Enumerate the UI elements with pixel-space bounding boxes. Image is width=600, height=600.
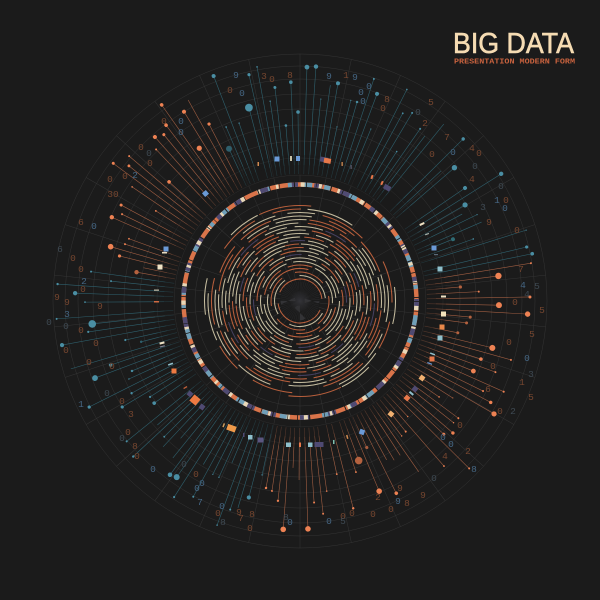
scattered digits: 5 — [340, 516, 346, 527]
scattered digits: 9 — [395, 496, 401, 507]
scattered digits: 0 — [448, 439, 454, 450]
scattered digits: 0 — [472, 161, 478, 172]
scattered digits: 9 — [397, 483, 403, 494]
scattered digits: 0 — [109, 361, 115, 372]
scattered digits: 0 — [70, 253, 76, 264]
scattered digits: 8 — [384, 94, 390, 105]
scattered digits: 4 — [469, 174, 475, 185]
scattered digits: 5 — [539, 305, 545, 316]
scattered digits: 0 — [194, 483, 200, 494]
chart core — [280, 281, 320, 321]
scattered digits: 0 — [122, 171, 128, 182]
scattered digits: 0 — [358, 87, 364, 98]
scattered digits: 0 — [366, 81, 372, 92]
scattered digits: 0 — [146, 148, 152, 159]
scattered digits — [46, 70, 545, 534]
scattered digits: 0 — [125, 427, 131, 438]
scattered digits: 0 — [239, 88, 245, 99]
scattered digits: 2 — [132, 170, 138, 181]
scattered digits: 0 — [80, 284, 86, 295]
scattered digits: 0 — [450, 147, 456, 158]
scattered digits: 8 — [471, 464, 477, 475]
scattered digits: 0 — [107, 174, 113, 185]
scattered digits: 8 — [220, 517, 226, 528]
scattered digits: 0 — [147, 158, 153, 169]
scattered digits: 9 — [97, 301, 103, 312]
scattered digits: 2 — [81, 276, 87, 287]
scattered digits: 9 — [486, 217, 492, 228]
scattered digits: 0 — [138, 142, 144, 153]
scattered digits: 4 — [524, 289, 530, 300]
scattered digits: 0 — [178, 116, 184, 127]
scattered digits: 1 — [343, 70, 349, 81]
scattered digits: 8 — [287, 70, 293, 81]
scattered digits: 7 — [197, 497, 203, 508]
scattered digits: 5 — [428, 97, 434, 108]
scattered digits: 0 — [161, 116, 167, 127]
scattered digits: 8 — [404, 498, 410, 509]
scattered digits: 0 — [93, 338, 99, 349]
scattered digits: 8 — [283, 512, 289, 523]
scattered digits: 7 — [444, 132, 450, 143]
scattered digits: 1 — [519, 377, 525, 388]
scattered digits: 0 — [46, 317, 52, 328]
scattered digits: 7 — [238, 513, 244, 524]
scattered digits: 2 — [510, 406, 516, 417]
scattered digits: 0 — [150, 464, 156, 475]
scattered digits: 9 — [236, 507, 242, 518]
scattered digits: 0 — [506, 337, 512, 348]
radial chart — [53, 54, 547, 548]
scattered digits: 6 — [78, 217, 84, 228]
scattered digits: 2 — [375, 492, 381, 503]
scattered digits: 0 — [227, 85, 233, 96]
scattered digits: 0 — [78, 264, 84, 275]
scattered digits: 0 — [388, 504, 394, 515]
scattered digits: 0 — [490, 361, 496, 372]
scattered digits: 9 — [420, 490, 426, 501]
scattered digits: 0 — [370, 509, 376, 520]
scattered digits: 0 — [498, 181, 504, 192]
scattered digits: 0 — [193, 469, 199, 480]
scattered digits: 3 — [528, 369, 534, 380]
scattered digits: 0 — [512, 297, 518, 308]
scattered digits: 0 — [199, 478, 205, 489]
scattered digits: 0 — [476, 148, 482, 159]
scattered digits: 0 — [431, 473, 437, 484]
scattered digits: 3 — [64, 309, 70, 320]
scattered digits: 1 — [494, 195, 500, 206]
scattered digits: 0 — [215, 508, 221, 519]
scattered digits: 0 — [340, 511, 346, 522]
scattered digits: 4 — [520, 280, 526, 291]
scattered digits: 0 — [524, 353, 530, 364]
scattered digits: 9 — [352, 72, 358, 83]
scattered digits: 0 — [219, 501, 225, 512]
scattered digits: 4 — [469, 143, 475, 154]
scattered digits: 0 — [326, 516, 332, 527]
blue data spokes — [56, 64, 534, 526]
scattered digits: 0 — [63, 321, 69, 332]
scattered digits: 8 — [132, 441, 138, 452]
scattered digits: 3 — [480, 202, 486, 213]
scattered digits: 6 — [485, 384, 491, 395]
segmented colour ring — [140, 141, 460, 461]
scattered digits: 0 — [360, 96, 366, 107]
scattered digits: 0 — [349, 508, 355, 519]
scattered digits: 9 — [233, 70, 239, 81]
scattered digits: 0 — [440, 432, 446, 443]
scattered digits: 8 — [249, 509, 255, 520]
scattered digits: 0 — [269, 74, 275, 85]
small data blocks — [154, 156, 446, 447]
scattered digits: 0 — [287, 517, 293, 528]
scattered digits: 30 — [107, 189, 119, 200]
scattered digits: 1 — [78, 399, 84, 410]
scattered digits: 0 — [78, 325, 84, 336]
scattered digits: 0 — [415, 107, 421, 118]
scattered digits: 0 — [247, 523, 253, 534]
scattered digits: 3 — [261, 71, 267, 82]
scattered digits: 0 — [380, 103, 386, 114]
title: BIG DATA — [453, 28, 575, 60]
scattered digits: 6 — [57, 244, 63, 255]
scattered digits: 0 — [429, 149, 435, 160]
scattered digits: 2 — [422, 118, 428, 129]
scattered digits: 0 — [86, 357, 92, 368]
scattered digits: 5 — [529, 329, 535, 340]
scattered digits: 3 — [128, 409, 134, 420]
scattered digits: 9 — [54, 292, 60, 303]
scattered digits: 7 — [518, 264, 524, 275]
scattered digits: 4 — [442, 451, 448, 462]
orange data spokes — [107, 100, 532, 532]
scattered digits: 0 — [91, 221, 97, 232]
inner concentric arc rings — [172, 173, 428, 429]
scattered digits: 0 — [104, 388, 110, 399]
scattered digits: 0 — [503, 195, 509, 206]
scattered digits: 9 — [64, 297, 70, 308]
scattered digits: 0 — [178, 127, 184, 138]
scattered digits: 2 — [465, 446, 471, 457]
scattered digits: 5 — [528, 392, 534, 403]
scattered digits: 0 — [514, 225, 520, 236]
scattered digits: 0 — [497, 406, 503, 417]
scattered digits: 0 — [502, 203, 508, 214]
scattered digits: 5 — [534, 281, 540, 292]
scattered digits: 0 — [119, 433, 125, 444]
scattered digits: 0 — [457, 420, 463, 431]
subtitle: PRESENTATION MODERN FORM — [454, 58, 576, 66]
scattered digits: 0 — [181, 459, 187, 470]
scattered digits: 0 — [63, 345, 69, 356]
scattered digits: 0 — [134, 451, 140, 462]
scattered digits: 9 — [326, 71, 332, 82]
scattered digits: 0 — [119, 396, 125, 407]
